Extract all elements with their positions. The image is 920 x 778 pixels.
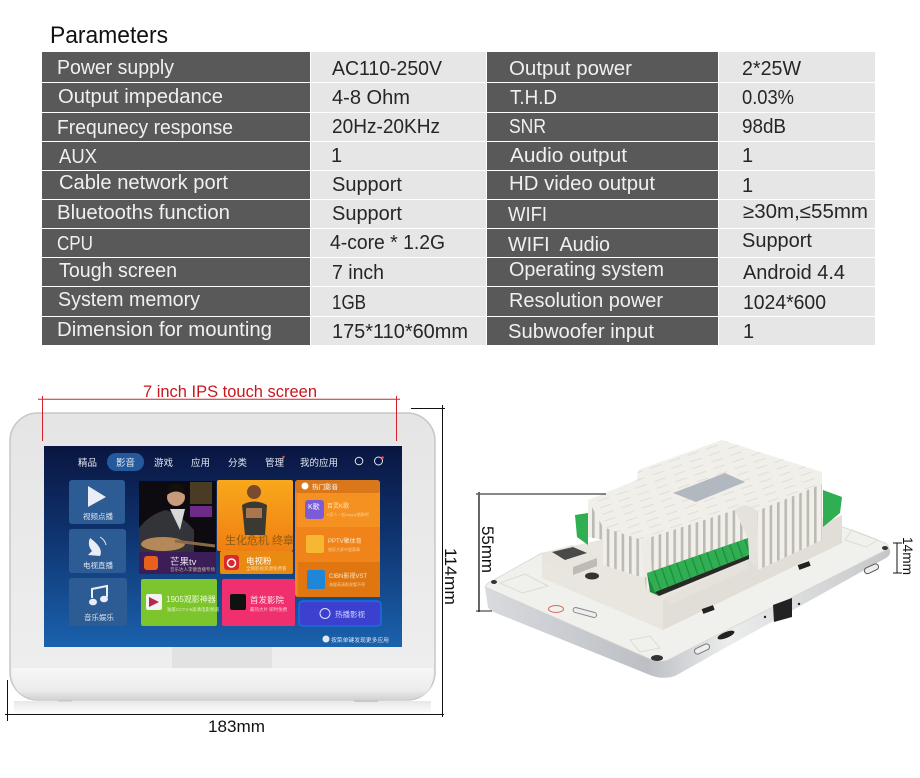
- screen nav bar: 游戏: [154, 457, 174, 469]
- row: cpu: 4-core * 1.2G: [330, 232, 445, 254]
- row: wifi: ≥30m,≤55mm: [743, 201, 868, 223]
- row: output impedance: [58, 86, 410, 109]
- device: rear view with terminals: [485, 440, 890, 678]
- dimension: 14mm thickness: [893, 537, 916, 575]
- row: subwoofer input: [508, 321, 754, 343]
- screen footer hint: 按菜单键发现更多应用: [331, 636, 389, 644]
- row: thd: 0.03%: [742, 87, 794, 109]
- screen nav bar: 我的应用: [300, 457, 338, 469]
- tile: mango tv: 芒果tv: [170, 556, 197, 568]
- rating label: [673, 473, 745, 502]
- row: operating system: [509, 259, 845, 284]
- tile: first run cinema: [222, 579, 295, 626]
- tile: resident evil: 电视粉: [246, 556, 272, 566]
- row: aux: 1: [331, 145, 342, 167]
- row: power supply: Power supply: [57, 57, 174, 79]
- screen footer hint: [322, 636, 389, 644]
- row: operating system: Operating system: [509, 259, 664, 281]
- panel: hot video list: 热门影音: [312, 482, 338, 491]
- row: tough screen: Tough screen: [59, 260, 177, 282]
- screen nav bar: 应用: [191, 457, 210, 469]
- tile: tv live: [69, 529, 126, 573]
- row: bluetooths function: Bluetooths function: [57, 202, 230, 224]
- row: aux: [59, 145, 342, 168]
- terminals rear: [575, 490, 842, 545]
- row: thd: [510, 87, 794, 109]
- tile: tv live: 电视直播: [83, 560, 113, 570]
- panel: hot video list: 百灵K歌: [327, 502, 349, 510]
- screen nav bar: [78, 453, 384, 471]
- row: thd: T.H.D: [510, 87, 557, 109]
- row: audio output: Audio output: [510, 145, 627, 167]
- screen: [44, 446, 402, 647]
- dimension: 7 inch screen: 7 inch IPS touch screen: [143, 382, 317, 401]
- tile: mango tv: [139, 481, 216, 574]
- row: bluetooths function: Support: [332, 203, 402, 225]
- row: cable network port: Support: [332, 174, 402, 196]
- row: power supply: [57, 57, 443, 80]
- row: audio output: [510, 145, 753, 167]
- heatsink top: [588, 440, 822, 540]
- row: tough screen: 7 inch: [332, 262, 384, 284]
- row: snr: SNR: [509, 116, 546, 138]
- screen nav bar: 影音: [116, 457, 135, 469]
- dimension: 183mm width: 183mm: [208, 717, 265, 736]
- title: Parameters: [50, 22, 168, 49]
- heatsink fins: [588, 484, 822, 590]
- row: wifi audio: [508, 230, 812, 256]
- row: subwoofer input: 1: [743, 321, 754, 343]
- row: output power: Output power: [509, 58, 632, 80]
- panel: hot video list: 独家大屏中超赛事: [328, 546, 360, 552]
- tile: video on demand: [69, 480, 125, 524]
- dimension: 7 inch screen: [38, 382, 400, 441]
- tile: resident evil: 生化危机 终章: [225, 533, 294, 547]
- row: frequency response: Frequnecy response: [57, 117, 233, 139]
- row: wifi: WIFI: [508, 204, 547, 226]
- row: cable network port: Cable network port: [59, 172, 228, 194]
- tile: mango tv: 音乐达人李健直播专场: [170, 566, 215, 573]
- tile: first run cinema: 首发影院: [250, 595, 285, 605]
- panel: parameters table left: [42, 52, 486, 345]
- row: dimension for mounting: Dimension for mounting: [57, 319, 272, 341]
- dimension: 55mm depth: [476, 492, 606, 612]
- row: snr: 98dB: [742, 116, 786, 138]
- panel: parameters table right: [487, 52, 875, 345]
- row: dimension for mounting: [57, 319, 468, 343]
- panel: hot video list: [295, 480, 380, 597]
- tile: music: 音乐娱乐: [84, 612, 114, 622]
- row: system memory: 1GB: [332, 292, 366, 314]
- device: front view with screen: [10, 413, 435, 715]
- row: hd video output: HD video output: [509, 173, 655, 195]
- button: hot movies: [299, 601, 381, 626]
- row: output impedance: 4-8 Ohm: [332, 87, 410, 109]
- row: cable network port: [59, 172, 402, 196]
- row: system memory: [58, 289, 366, 314]
- row: hd video output: [509, 173, 753, 197]
- dimension: 14mm thickness: 14mm: [900, 537, 916, 575]
- panel: hot video list: K歌: [308, 502, 320, 511]
- row: resolution power: 1024*600: [743, 292, 826, 314]
- row: wifi audio: WIFI Audio: [508, 234, 610, 256]
- row: tough screen: [59, 260, 384, 284]
- ethernet port: [542, 545, 599, 580]
- row: cpu: CPU: [57, 233, 93, 255]
- row: resolution power: [509, 290, 826, 314]
- screen nav bar: 分类: [228, 457, 248, 469]
- row: power supply: AC110-250V: [332, 58, 443, 80]
- tile: 1905 movies: 独家CCTV-6高清电影频道: [167, 606, 220, 613]
- row: audio output: 1: [742, 145, 753, 167]
- panel: hot video list: 海量高清影视看不停: [329, 581, 365, 587]
- row: resolution power: Resolution power: [509, 290, 663, 312]
- mounting base: [542, 490, 842, 630]
- row: operating system: Android 4.4: [743, 262, 845, 284]
- row: output impedance: Output impedance: [58, 86, 223, 108]
- screen nav bar: 精品: [78, 457, 97, 469]
- row: snr: [509, 116, 786, 138]
- panel: hot video list: PPTV聚体育: [328, 537, 362, 545]
- silver plate side: [485, 545, 890, 678]
- row: subwoofer input: Subwoofer input: [508, 321, 654, 343]
- panel: hot video list: CIBN影视VST: [329, 572, 367, 580]
- row: output power: 2*25W: [742, 58, 801, 80]
- green terminal block: [647, 538, 749, 605]
- row: system memory: System memory: [58, 289, 200, 311]
- dimension: 114mm height: [411, 405, 460, 717]
- row: frequency response: [57, 116, 440, 139]
- dimension: 114mm height: 114mm: [441, 548, 460, 605]
- row: dimension for mounting: 175*110*60mm: [332, 321, 468, 343]
- tile: video on demand: 视频点播: [83, 511, 113, 521]
- button: hot movies: 热播影视: [335, 609, 365, 619]
- tile: first run cinema: 最热大片 即时免费: [250, 606, 288, 613]
- dimension: 183mm width: [5, 680, 444, 736]
- panel: hot video list: K家人一起happy唱歌吧: [327, 511, 369, 517]
- tile: 1905 movies: 1905观影神器: [166, 594, 216, 604]
- tile: music: [69, 578, 127, 626]
- tile: 1905 movies: [141, 579, 220, 626]
- plate back surface: [485, 527, 888, 661]
- row: bluetooths function: [57, 202, 402, 225]
- row: aux: AUX: [59, 146, 97, 168]
- row: wifi audio: Support: [742, 230, 812, 252]
- row: hd video output: 1: [742, 175, 753, 197]
- row: cpu: [57, 232, 445, 255]
- row: frequency response: 20Hz-20KHz: [332, 116, 440, 138]
- side ports and switches: [548, 561, 880, 655]
- tile: resident evil: 全网影视资源免费看: [246, 565, 287, 572]
- screen nav bar: 管理: [265, 457, 285, 469]
- dimension: 55mm depth: 55mm: [478, 526, 497, 573]
- row: output power: [509, 58, 801, 80]
- tile: resident evil: [217, 480, 294, 574]
- row: wifi: [508, 201, 868, 226]
